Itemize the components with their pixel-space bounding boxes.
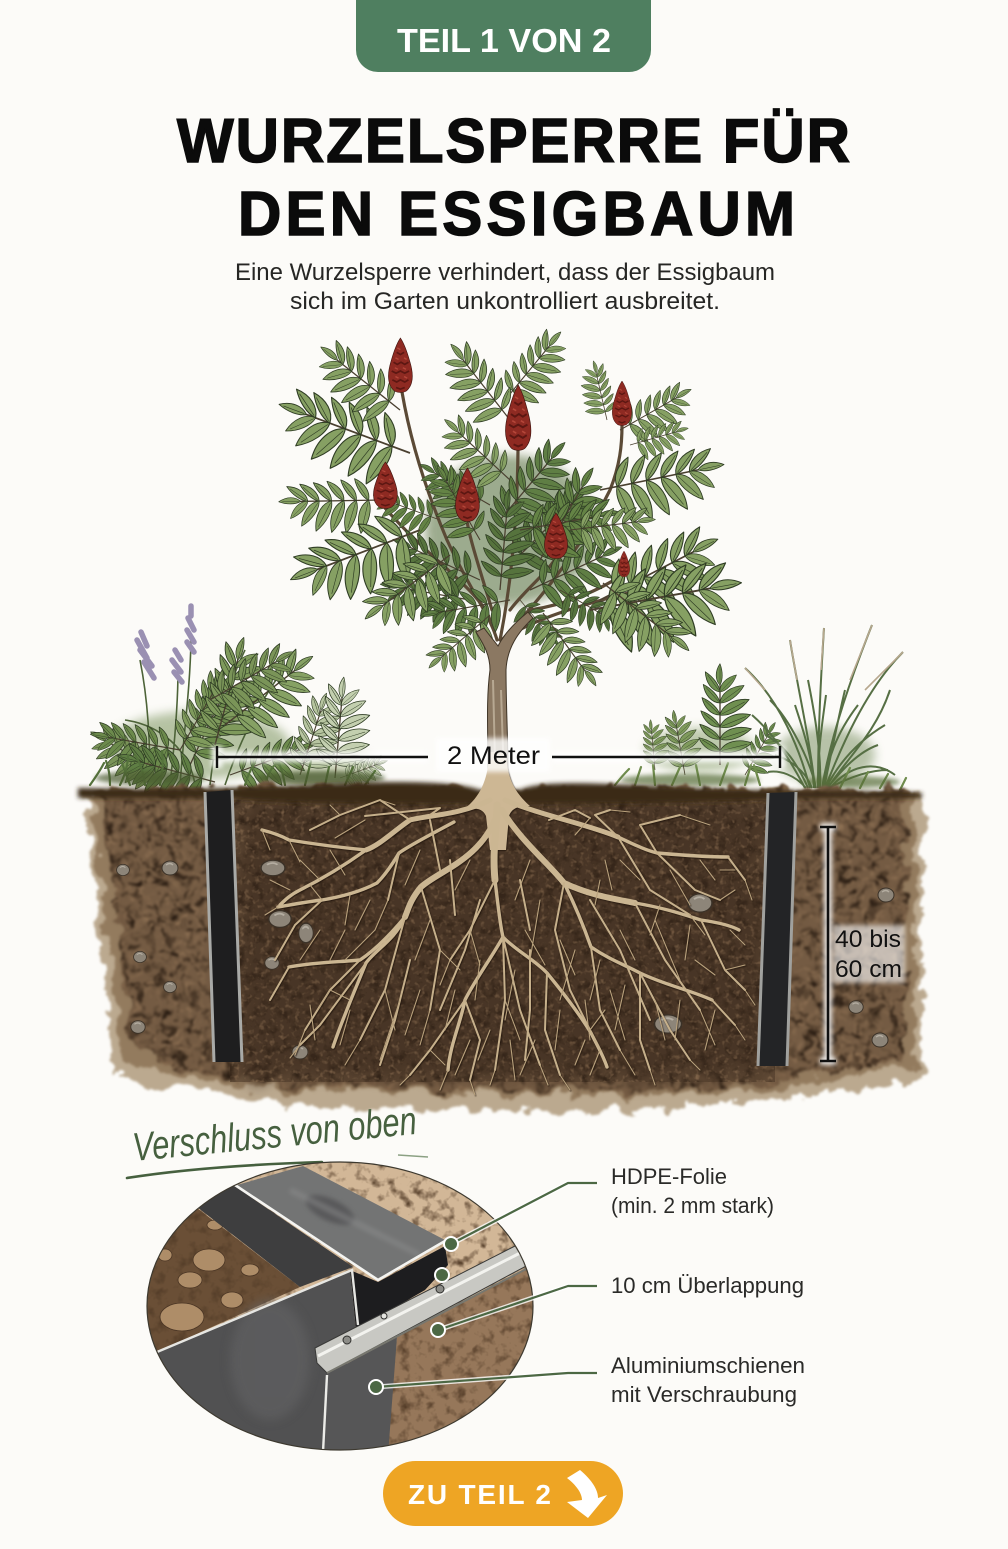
icon: arrow	[567, 1470, 607, 1518]
callout: aluminium rails: mit Verschraubung	[611, 1382, 797, 1407]
next part button: ZU TEIL 2	[408, 1479, 551, 1510]
callout: HDPE foil: HDPE-Folie	[611, 1164, 727, 1189]
red flower cones	[388, 338, 412, 392]
width dimension: 2 Meter	[447, 742, 540, 770]
callout: HDPE foil	[611, 1164, 774, 1218]
callout: aluminium rails	[611, 1353, 805, 1407]
depth dimension: 60 cm	[835, 956, 902, 983]
right barrier	[757, 792, 797, 1066]
pinnate fronds	[263, 319, 750, 703]
title: WURZELSPERRE FÜR	[177, 106, 850, 175]
detail oval: barrier overlap	[130, 1155, 540, 1455]
section heading: Verschluss von oben	[131, 1099, 419, 1170]
lower wall	[322, 1337, 397, 1455]
width dimension	[217, 738, 780, 772]
next part button	[383, 1461, 623, 1526]
title: DEN ESSIGBAUM	[238, 179, 795, 248]
soil cross-section	[78, 782, 922, 1110]
dark gravel soil	[148, 1209, 300, 1350]
depth dimension: 40 bis	[835, 926, 901, 953]
dark interior	[350, 1246, 448, 1330]
callout: overlap: 10 cm Überlappung	[611, 1273, 804, 1298]
tree root system	[262, 752, 755, 1095]
subtitle: sich im Garten unkontrolliert ausbreitet.	[290, 288, 720, 315]
subtitle: Eine Wurzelsperre verhindert, dass der Essigbaum	[235, 259, 775, 286]
branches	[385, 392, 640, 640]
part badge: TEIL 1 VON 2	[397, 22, 611, 59]
front wall	[158, 1272, 356, 1449]
part badge	[356, 0, 651, 72]
title	[177, 106, 850, 248]
top slab	[237, 1166, 445, 1281]
light soil	[192, 1162, 526, 1364]
callout: HDPE foil: (min. 2 mm stark)	[611, 1193, 774, 1218]
canopy shading	[425, 455, 595, 605]
left garden plants	[76, 606, 393, 814]
tree	[263, 319, 750, 770]
callout: aluminium rails: Aluminiumschienen	[611, 1353, 805, 1378]
depth dimension	[820, 827, 905, 1061]
callout leader lines	[369, 1183, 597, 1394]
subtitle	[235, 259, 775, 315]
section heading	[127, 1099, 428, 1178]
soil stones	[117, 860, 894, 1059]
right brown soil	[388, 1270, 532, 1445]
left barrier	[204, 790, 243, 1062]
trunk	[476, 612, 533, 770]
right garden plants	[615, 625, 906, 790]
back wall	[197, 1185, 353, 1287]
aluminium rail	[315, 1245, 528, 1373]
